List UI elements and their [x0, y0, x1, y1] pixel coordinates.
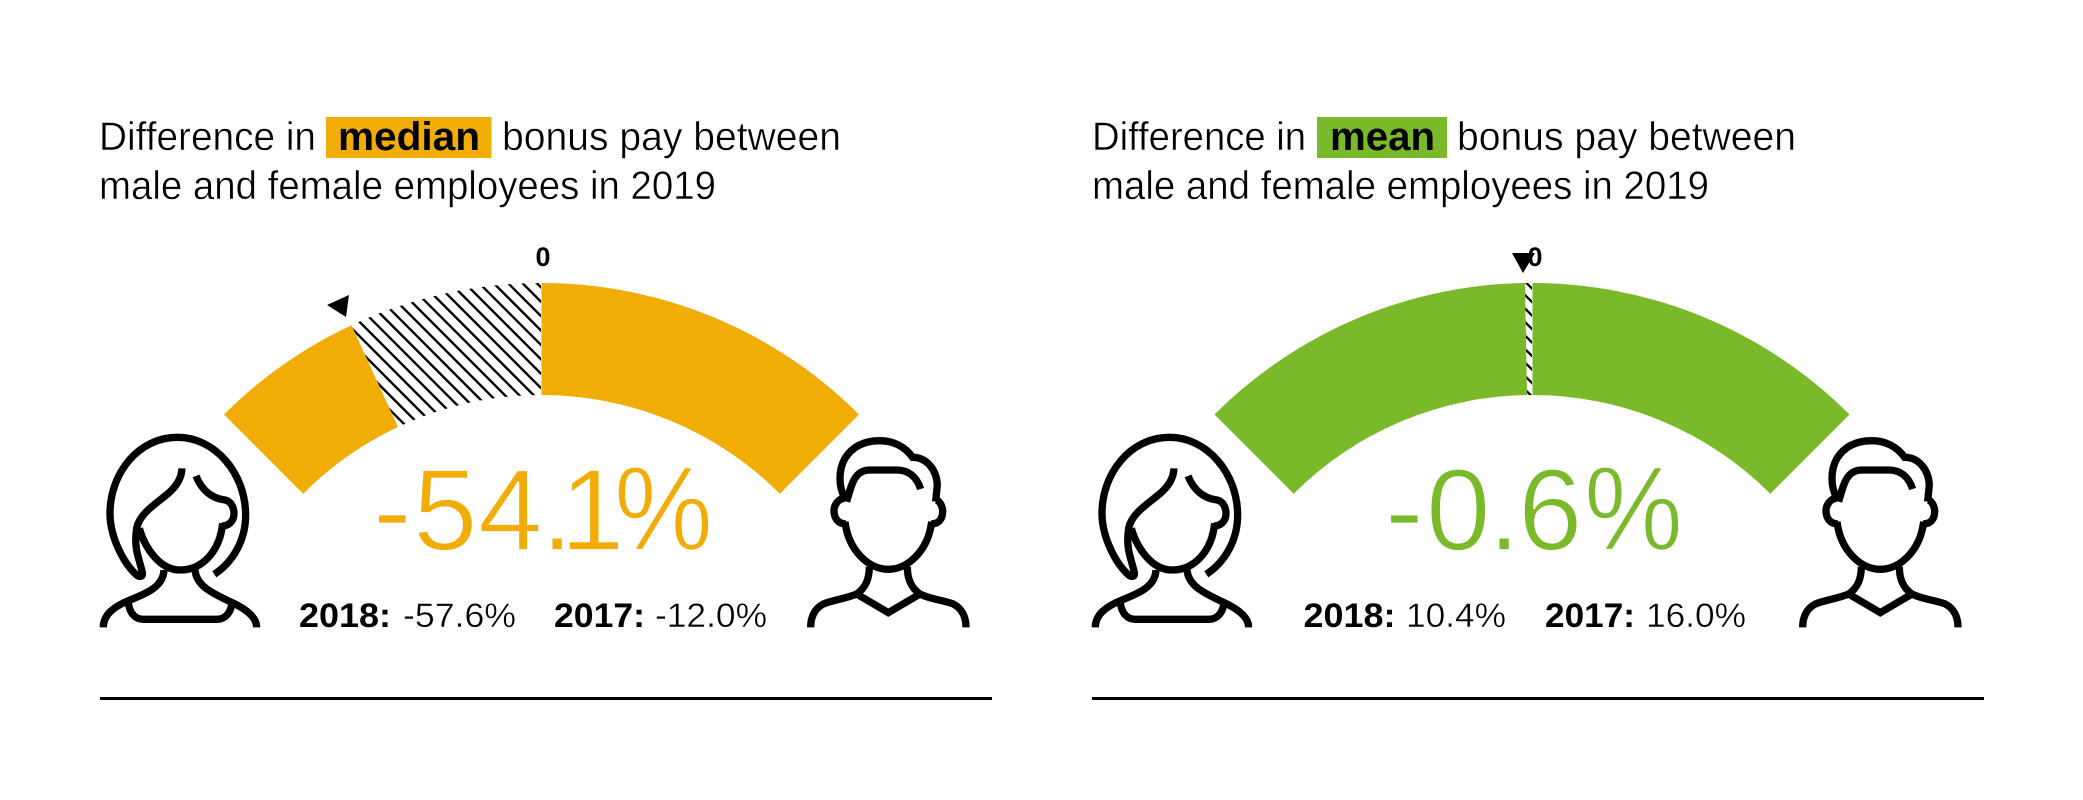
big value: -0.6: [1385, 445, 1583, 575]
previous years: 2018:: [299, 597, 391, 635]
icon: man: [811, 441, 966, 627]
big value: %: [1584, 442, 1683, 576]
heading: mean: bonus pay between: [1457, 115, 1796, 159]
icon: man: [1803, 441, 1958, 627]
big value: [1385, 442, 1683, 576]
icon: woman: [1095, 437, 1249, 627]
heading: median: bonus pay between: [502, 115, 841, 159]
heading: median: median: [338, 115, 480, 159]
gauge: median: [224, 280, 859, 494]
big value: %: [614, 442, 713, 576]
previous years: 16.0%: [1646, 597, 1746, 635]
panel: median bonus pay: [99, 115, 992, 700]
rule: [1092, 697, 1984, 700]
panel: mean bonus pay: [1092, 115, 1984, 700]
heading: median: male and female employees in 2019: [99, 164, 716, 208]
big value: -54.1: [373, 445, 625, 575]
heading: mean: Difference in: [1092, 115, 1306, 159]
gauge: mean: [1214, 280, 1850, 494]
heading: mean: mean: [1330, 115, 1435, 159]
previous years: 2018:: [1304, 597, 1396, 635]
marker arrow: [327, 295, 349, 317]
zero label: 0: [535, 242, 551, 272]
previous years: 2017:: [554, 597, 645, 635]
heading: median: Difference in: [99, 115, 316, 159]
previous years: 2017:: [1545, 597, 1635, 635]
rule: [100, 697, 992, 700]
previous years: -57.6%: [403, 597, 516, 635]
previous years: -12.0%: [655, 597, 767, 635]
heading: median: [99, 115, 841, 208]
heading: mean: male and female employees in 2019: [1092, 164, 1709, 208]
previous years: 10.4%: [1406, 597, 1506, 635]
marker arrow: [1512, 253, 1535, 273]
previous years: [1304, 597, 1746, 635]
heading: mean: [1092, 115, 1796, 208]
zero label: 0: [1527, 242, 1543, 272]
icon: woman: [103, 437, 257, 627]
previous years: [299, 597, 767, 635]
